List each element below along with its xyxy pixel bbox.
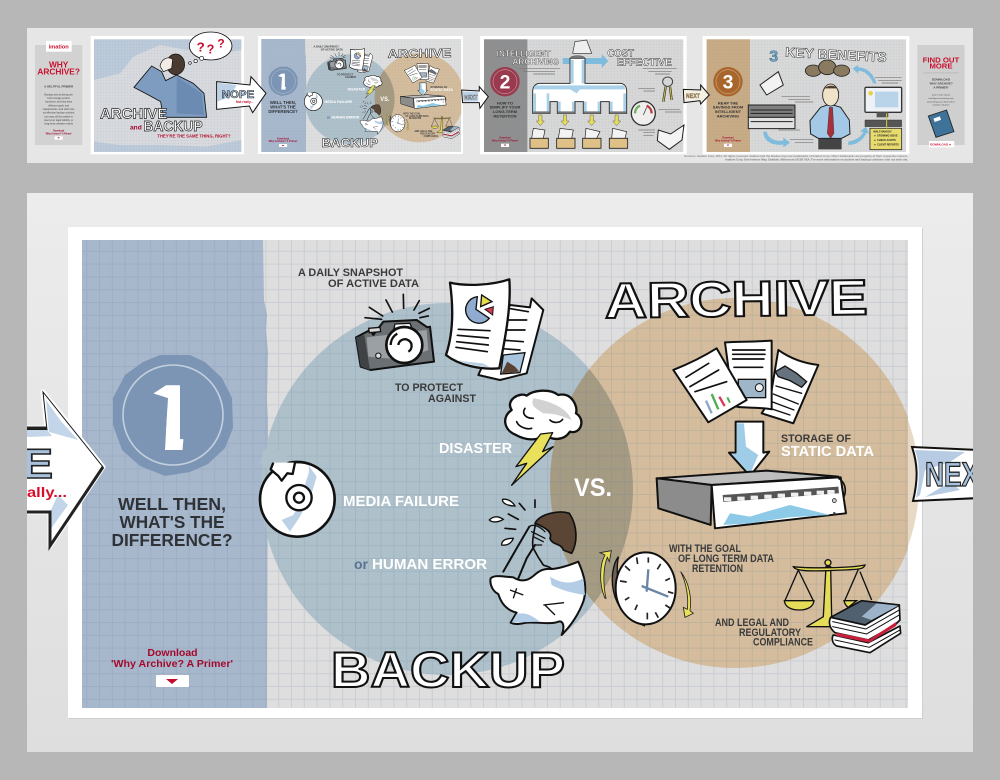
text: legal and regulatory: AND LEGAL AND bbox=[715, 617, 789, 629]
heading: cost effective: COST bbox=[607, 49, 634, 60]
icon: gauge bbox=[631, 101, 655, 125]
heading: cost effective: EFFECTIVE bbox=[617, 58, 672, 69]
text: to protect against: AGAINST bbox=[428, 393, 476, 405]
thought bubble: ? bbox=[207, 42, 214, 56]
text: to protect against bbox=[395, 382, 476, 405]
badge: 3: 3 bbox=[723, 73, 734, 94]
pipe manifold bbox=[533, 56, 627, 113]
arrow: nope not really: NOPE bbox=[222, 89, 254, 101]
badge: 2: 2 bbox=[500, 73, 510, 94]
text: how to simplify: HOW TO bbox=[497, 101, 513, 106]
heading: archive and backup: BACKUP bbox=[143, 119, 203, 135]
sidebar: why archive: both storage-centric bbox=[47, 97, 71, 100]
sidebar: why archive: imation bbox=[49, 45, 69, 51]
arrow: next 1: NEXT bbox=[464, 94, 478, 101]
arrow: into archive bbox=[729, 422, 769, 476]
sidebar: find out more: DOWNLOAD bbox=[932, 78, 951, 82]
panel: step detail bbox=[20, 193, 995, 752]
text: how to simplify: LONG-TERM bbox=[493, 109, 518, 114]
sidebar: find out more: Learn more about bbox=[932, 94, 950, 97]
sidebar: why archive: A HELPFUL PRIMER bbox=[44, 84, 74, 88]
thumbnail: step 1 bbox=[258, 36, 464, 154]
figure: business man bbox=[810, 84, 850, 149]
text: reap the savings: SAVINGS FROM bbox=[713, 105, 744, 110]
icon: law books bbox=[829, 601, 901, 653]
sidebar: find out more: MORE bbox=[929, 61, 952, 70]
heading: intelligent archiving: ARCHIVING bbox=[512, 57, 559, 66]
arrow: next 2: NEXT bbox=[686, 93, 700, 100]
badge: 2 bbox=[490, 67, 520, 96]
note: yellow checklist: ► GROWING ISSUE bbox=[874, 135, 898, 138]
heading: archive and backup bbox=[100, 106, 231, 138]
arrow: nope not really: Not really... bbox=[236, 100, 253, 104]
icon: storm cloud bbox=[505, 391, 581, 485]
thumbnail: step 2 bbox=[480, 36, 687, 154]
footnote: Sources: Imation Corp. 2011. All rights reserved. Imation and the Imation logo are trademarks of Imation Corp. Other trademarks are property of their respective owners. bbox=[684, 154, 908, 158]
heading: well then: WHAT'S THE bbox=[120, 512, 224, 532]
sidebar: why archive: Download bbox=[53, 130, 65, 132]
text: storage of static data bbox=[781, 433, 874, 460]
arrow: nope pointer: ally... bbox=[27, 484, 67, 500]
sidebar: find out more: intelligent archiving and bbox=[929, 97, 954, 100]
heading: well then: WELL THEN, bbox=[118, 494, 226, 514]
heading: archive and backup: ARCHIVE bbox=[100, 106, 168, 122]
document: paragraph bbox=[762, 350, 818, 423]
figure: man scratching head bbox=[134, 54, 207, 117]
text: daily snapshot: A DAILY SNAPSHOT bbox=[298, 267, 403, 279]
sidebar: why archive: 'Why Archive? A Primer' bbox=[45, 132, 72, 135]
label: vs: VS. bbox=[574, 474, 612, 502]
text: reap the savings: Download bbox=[722, 138, 734, 140]
scene: difference between backup and archive bbox=[82, 240, 920, 708]
thought bubble bbox=[189, 32, 232, 64]
icon: open book bbox=[657, 125, 684, 149]
label: human error: HUMAN ERROR bbox=[372, 556, 487, 573]
arrow: flow 1 bbox=[763, 132, 790, 147]
text: how to simplify: 'Why Archive? A Primer' bbox=[492, 140, 519, 143]
panel: overview strip bbox=[27, 28, 973, 163]
sidebar: why archive: meet your legal liability, or bbox=[44, 119, 73, 122]
icon: snapshot documents bbox=[446, 279, 543, 380]
circle: archive bbox=[550, 298, 920, 668]
yellow arrow down bbox=[681, 572, 693, 617]
text: reap the savings bbox=[713, 101, 744, 147]
icon: camera bbox=[356, 294, 434, 370]
footnote: Imation Corp. One Imation Way, Oakdale, Minnesota 55128 USA. For more information on archive and backup solutions visit our web site. bbox=[725, 158, 908, 162]
card frame bbox=[68, 227, 922, 718]
graph paper grid bbox=[82, 240, 908, 708]
thumbnail: archive and backup bbox=[91, 32, 244, 154]
arrow: nope pointer bbox=[20, 392, 103, 546]
download link: Download bbox=[147, 647, 198, 659]
arrow: next 1 bbox=[462, 87, 488, 108]
icon: computer bbox=[865, 87, 902, 127]
arrow lettering: E bbox=[22, 440, 53, 487]
sidebar: find out more bbox=[917, 45, 965, 147]
badge: number 1 bbox=[113, 355, 233, 476]
label: media failure: MEDIA FAILURE bbox=[343, 493, 459, 510]
archive circle overflow on frame bbox=[908, 420, 919, 546]
small notes bbox=[519, 69, 682, 135]
icon: clock bbox=[600, 551, 693, 626]
badge: number 1: 1 bbox=[144, 368, 196, 470]
text: reap the savings: 'Why Archive? A Primer' bbox=[715, 140, 742, 143]
lightning bbox=[512, 433, 553, 485]
heading: archive and backup: and bbox=[130, 124, 142, 131]
badge: 3 bbox=[713, 67, 743, 96]
text: storage of static data: STATIC DATA bbox=[781, 443, 874, 460]
note: yellow checklist: WALTHAM DIY bbox=[873, 130, 892, 134]
icon: keys bbox=[663, 77, 673, 102]
sidebar: why archive: you may still be unable to bbox=[44, 115, 73, 118]
sidebar: find out more: DOWNLOAD ► bbox=[930, 143, 952, 147]
heading: 3 key benefits: KEY BENEFITS bbox=[785, 45, 887, 65]
heading: cost effective bbox=[607, 49, 672, 69]
icon: book bbox=[928, 110, 954, 137]
document: chart bbox=[673, 348, 747, 422]
blue column bbox=[82, 240, 268, 708]
sidebar: why archive: requirements. And until now, bbox=[43, 108, 75, 111]
text: how to simplify: SIMPLIFY YOUR bbox=[490, 105, 521, 110]
sidebar: why archive: Backup and archiving are bbox=[44, 94, 74, 96]
text: how to simplify bbox=[490, 101, 521, 147]
icon: server bbox=[748, 105, 795, 129]
icon: storage server bbox=[657, 471, 846, 528]
footnote bbox=[684, 154, 908, 162]
documents above pipe bbox=[573, 40, 592, 53]
arrow: flow 2 bbox=[848, 127, 869, 145]
arrow: next pointer bbox=[912, 447, 995, 501]
circle overlap bbox=[261, 303, 633, 675]
icon: money bags bbox=[805, 60, 850, 76]
sidebar: why archive: WHY bbox=[49, 59, 69, 69]
text: reap the savings: REAP THE bbox=[718, 101, 738, 106]
sidebar: find out more: FIND OUT bbox=[923, 55, 960, 64]
heading: archive: ARCHIVE bbox=[604, 269, 868, 329]
sidebar: why archive: different goals and bbox=[48, 104, 70, 107]
arrow: next 2 bbox=[683, 85, 709, 104]
text: legal and regulatory: REGULATORY bbox=[739, 627, 802, 639]
text: reap the savings: INTELLIGENT bbox=[715, 109, 742, 114]
label: human error: or bbox=[354, 556, 369, 572]
icon: archived documents bbox=[673, 341, 818, 423]
arrow: nope not really bbox=[217, 77, 266, 113]
download link bbox=[111, 647, 233, 687]
heading: 3 key benefits: 3 bbox=[769, 49, 778, 66]
text: daily snapshot: OF ACTIVE DATA bbox=[328, 278, 419, 290]
text: long term retention bbox=[669, 543, 774, 575]
label: disaster: DISASTER bbox=[439, 440, 512, 457]
sidebar: why archive: functions, but they have bbox=[45, 101, 73, 104]
text: legal and regulatory bbox=[715, 617, 813, 648]
sidebar: find out more: protecting your data with a bbox=[927, 100, 956, 103]
sidebar: why archive: an effective backup solution bbox=[43, 112, 75, 115]
heading: backup: BACKUP bbox=[331, 642, 565, 698]
thought bubble: ? bbox=[197, 39, 205, 54]
heading: intelligent archiving bbox=[497, 49, 559, 66]
sidebar: why archive: ARCHIVE? bbox=[37, 67, 80, 77]
small notes bbox=[778, 78, 902, 142]
text: storage of static data: STORAGE OF bbox=[781, 433, 851, 445]
arrow: blue flow bbox=[563, 54, 608, 68]
text: long term retention: WITH THE GOAL bbox=[669, 543, 741, 555]
arrow: flow 3 bbox=[853, 65, 877, 83]
text: how to simplify: Download bbox=[499, 138, 511, 140]
yellow arrow up bbox=[600, 551, 611, 598]
text: legal and regulatory: COMPLIANCE bbox=[753, 636, 813, 648]
thumbnail: step 3 bbox=[703, 36, 909, 154]
sidebar: find out more: A PRIMER' bbox=[933, 86, 949, 90]
text: long term retention: RETENTION bbox=[692, 563, 743, 575]
note: yellow checklist bbox=[870, 113, 902, 150]
download link: 'Why Archive? A Primer' bbox=[111, 658, 233, 670]
arrows and folders bbox=[530, 115, 628, 148]
document: picture bbox=[725, 341, 772, 409]
sidebar: find out more: 'WHY ARCHIVE? bbox=[929, 82, 953, 86]
sidebar: why archive: long-term retention needs bbox=[44, 123, 74, 126]
icon: scales bbox=[784, 560, 872, 627]
text: daily snapshot bbox=[298, 267, 419, 290]
heading: archive and backup: THEY'RE THE SAME THING, RIGHT? bbox=[157, 133, 231, 138]
thought bubble: ? bbox=[217, 36, 225, 50]
note: yellow checklist: ► CHECK AUDITS bbox=[874, 139, 896, 142]
text: how to simplify: RETENTION bbox=[493, 113, 517, 118]
heading: well then bbox=[112, 494, 232, 550]
icon: damaged cd bbox=[260, 450, 335, 537]
sidebar: why archive bbox=[35, 41, 82, 145]
heading: intelligent archiving: INTELLIGENT bbox=[497, 49, 551, 58]
icon: money stack bbox=[760, 72, 783, 95]
heading: well then: DIFFERENCE? bbox=[112, 530, 232, 550]
text: reap the savings: ARCHIVING bbox=[717, 113, 739, 118]
circle: backup bbox=[261, 303, 633, 675]
note: yellow checklist: ► CLIENT REPORTS bbox=[874, 143, 899, 146]
text: long term retention: OF LONG TERM DATA bbox=[678, 553, 774, 565]
text: to protect against: TO PROTECT bbox=[395, 382, 463, 394]
sidebar: find out more: smarter solution bbox=[933, 104, 950, 107]
figure: stressed man bbox=[489, 499, 585, 635]
